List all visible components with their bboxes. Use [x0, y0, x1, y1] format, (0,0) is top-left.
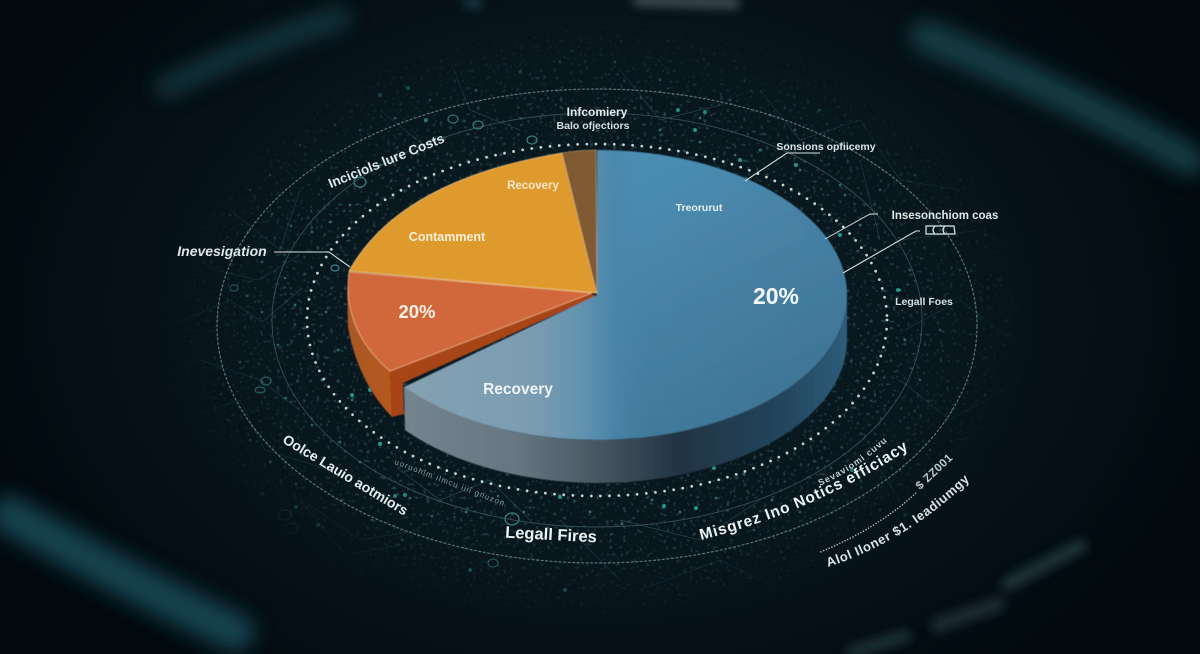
middle faint ring [272, 113, 922, 527]
curved caption: lower right: Alol Iloner $1. Ieadiumgy [828, 475, 968, 567]
blue slice side wall [404, 295, 847, 483]
3D pie chart [346, 149, 848, 484]
red slice outer wall [347, 285, 392, 417]
curved label: Incidents lure costs: Inciciols lure Costs [326, 131, 447, 191]
curved label: bottom left: Oolce Lauio aotmiors [280, 431, 411, 519]
small curved caption: Sevaviomi cuvu [818, 438, 887, 486]
brown slice top [562, 150, 597, 294]
big value: 20% on red: 20% [398, 301, 436, 322]
callout: small box icon [843, 226, 955, 273]
callout: Sensors efficiency [745, 141, 876, 181]
callout: Investigation [177, 243, 350, 267]
slice label: Treatment: Treorurut [676, 202, 723, 214]
slice label: Recovery on blue: Recovery [483, 381, 553, 398]
scattered data dots [228, 62, 1030, 590]
slice label: Containment: Contamment [409, 230, 486, 244]
callout: Investigation: Inevesigation [177, 243, 267, 259]
label: Legal Fires: Legall Fires [505, 524, 597, 546]
slice label: Recovery on orange: Recovery [507, 180, 559, 192]
red slice cut face [390, 293, 596, 417]
callout: Sensors efficiency: Sonsions opfiicemy [776, 141, 876, 153]
outer solid ring [217, 89, 977, 563]
blue slice top: treatment and recovery [404, 149, 848, 441]
small teal text arc: uoruohlm ilmcu iiii gnuzon [393, 457, 507, 508]
label: Legal Fees: Legall Foes [895, 296, 953, 308]
label: top two lines [557, 105, 630, 132]
label: top two lines: Infcomiery [567, 105, 628, 119]
callout: Insesonchiom costs: Insesonchiom coas [892, 210, 998, 222]
red slice top [348, 272, 592, 371]
dotted inner ring [307, 144, 887, 496]
orange slice top [349, 153, 597, 293]
network lines [150, 60, 1040, 600]
star-map speckle field [186, 31, 1012, 608]
label: top two lines: Balo ofjectiors [557, 120, 630, 132]
dotted curved caption: ....................................... $ ZZ001 [820, 454, 953, 553]
big value: 20% on blue: 20% [753, 283, 799, 309]
curved label: Notice efficiency: Misgrez Ino Notics efficiacy [699, 442, 906, 540]
callout: Insesonchiom costs [825, 210, 998, 239]
